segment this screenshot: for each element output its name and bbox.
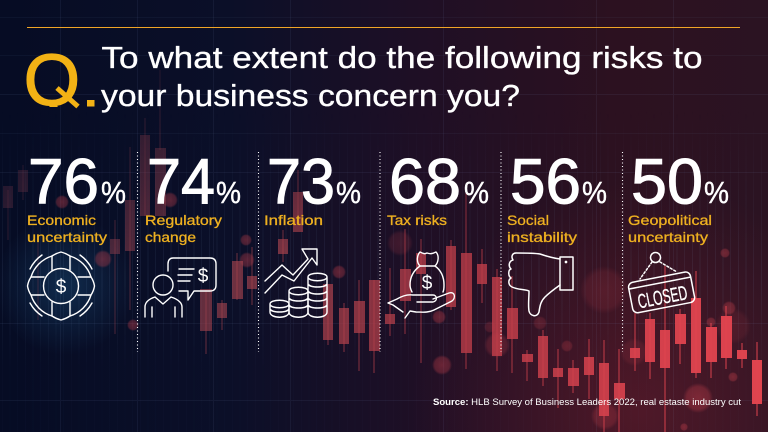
Q mark: Q: [24, 40, 80, 121]
icon: lifebuoy with dollar: [28, 252, 94, 320]
label: regulatory change: Regulatory: [145, 212, 222, 228]
stat: 68%: 68: [389, 146, 461, 218]
stat: 50%: 50: [631, 146, 703, 218]
icon: person with speech bubble: [145, 258, 216, 317]
Q mark: [26, 53, 94, 108]
icon: rising arrow and coins: [265, 249, 327, 317]
stat: 76%: %: [101, 175, 126, 210]
icon: person with speech bubble: $: [198, 266, 209, 287]
label: tax risks: Tax risks: [387, 212, 447, 228]
top rule: [27, 27, 740, 28]
title: [101, 40, 702, 113]
column dividers: [138, 152, 622, 352]
stat: 50%: %: [704, 175, 729, 210]
stat: 73%: %: [336, 175, 361, 210]
icon: closed sign: CLOSED: [636, 282, 689, 313]
stat: 56%: 56: [510, 146, 581, 218]
label: economic uncertainty: Economic: [27, 212, 96, 228]
label: geopolitical uncertainty: uncertainty: [628, 229, 708, 245]
label: economic uncertainty: [27, 212, 107, 245]
label: regulatory change: [145, 212, 222, 245]
stat: 68%: %: [464, 175, 489, 210]
icon: lifebuoy with dollar: $: [56, 277, 67, 298]
stat: 74%: %: [216, 175, 241, 210]
label: social instability: [507, 212, 577, 245]
stat: 56%: %: [582, 175, 607, 210]
source note: Source: HLB Survey of Business Leaders 2022, real estaste industry cut: [433, 396, 741, 407]
icon: closed sign: [628, 252, 696, 315]
stat: 74%: 74: [147, 146, 215, 218]
label: inflation: Inflation: [264, 212, 323, 228]
icon: money bag on hand: $: [422, 273, 433, 294]
label: social instability: instability: [507, 229, 577, 245]
label: regulatory change: change: [145, 229, 196, 245]
label: social instability: Social: [507, 212, 549, 228]
stat: 76%: 76: [28, 146, 99, 218]
icon: money bag on hand: [388, 252, 454, 318]
title: your business concern you?: [101, 78, 520, 113]
bokeh lights: [55, 192, 751, 431]
stat: 73%: 73: [267, 146, 335, 218]
label: geopolitical uncertainty: [628, 212, 712, 245]
label: geopolitical uncertainty: Geopolitical: [628, 212, 712, 228]
icon: thumbs down: [509, 253, 573, 316]
label: economic uncertainty: uncertainty: [27, 229, 107, 245]
title: To what extent do the following risks to: [102, 40, 702, 75]
